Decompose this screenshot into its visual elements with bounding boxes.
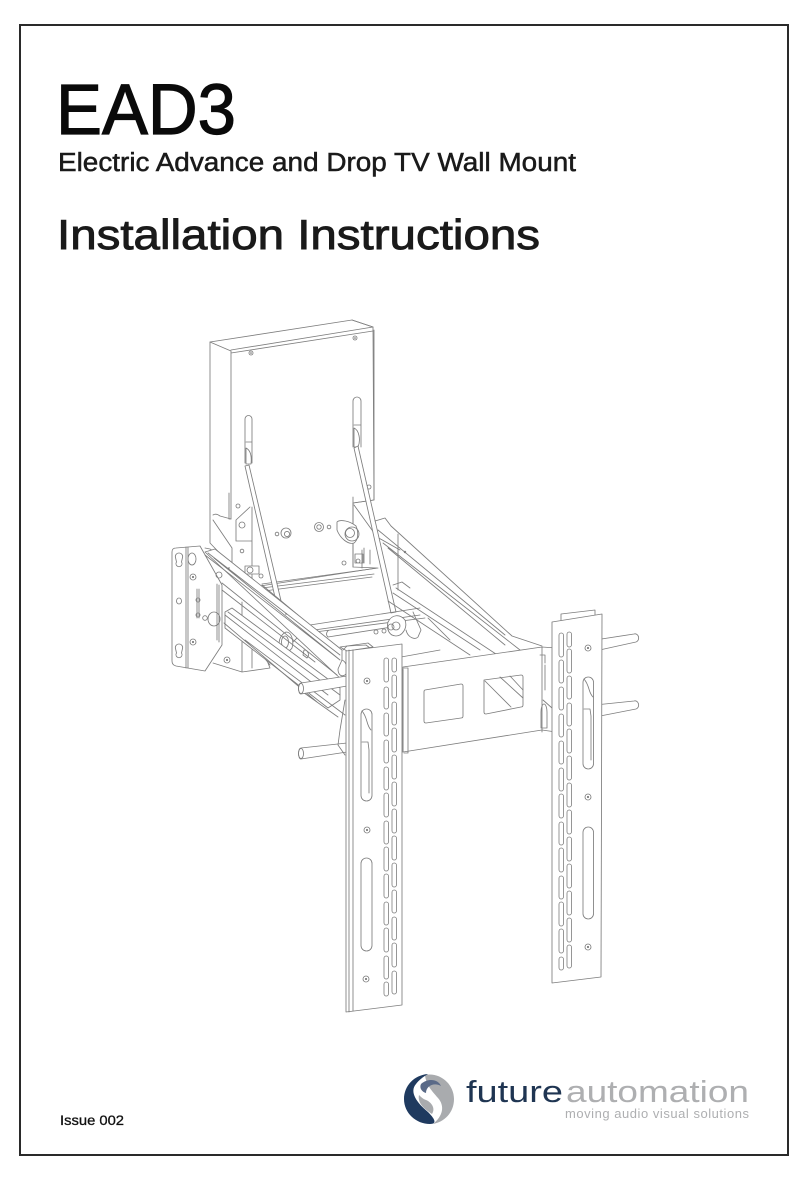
- wall bracket: [172, 546, 230, 671]
- illustration: wall mount line drawing: [172, 320, 639, 1012]
- heading: installation instructions: Installation Instructions: [57, 211, 540, 258]
- logo tagline: moving audio visual solutions: [565, 1106, 750, 1121]
- left vertical bracket: [340, 643, 402, 1012]
- logo: future automation: [404, 1074, 750, 1124]
- slot columns left: [384, 658, 396, 996]
- rear lift plate: [210, 320, 400, 591]
- large slots left: [361, 709, 372, 951]
- large slots right: [583, 677, 594, 919]
- centre fittings and motor: [245, 521, 370, 574]
- fixing holes right: [585, 645, 591, 950]
- slot columns right: [559, 632, 572, 970]
- front guide rails: [205, 549, 345, 717]
- rear guide rails: [375, 518, 542, 660]
- right vertical bracket: [552, 610, 602, 983]
- fixing holes left: [363, 678, 370, 982]
- title: EAD3: EAD3: [56, 71, 236, 150]
- lift arms: [245, 446, 396, 613]
- logo wordmark: future: future: [466, 1074, 563, 1109]
- rear mounting rods: [595, 634, 639, 717]
- carriage tray: [213, 585, 450, 672]
- cross plate with two windows: [393, 647, 556, 753]
- issue number: Issue 002: [60, 1112, 124, 1128]
- logo mark: [404, 1074, 454, 1124]
- subtitle: Electric Advance and Drop TV Wall Mount: [58, 149, 576, 177]
- left mounting rods: [298, 660, 347, 759]
- logo wordmark: automation: automation: [566, 1074, 749, 1109]
